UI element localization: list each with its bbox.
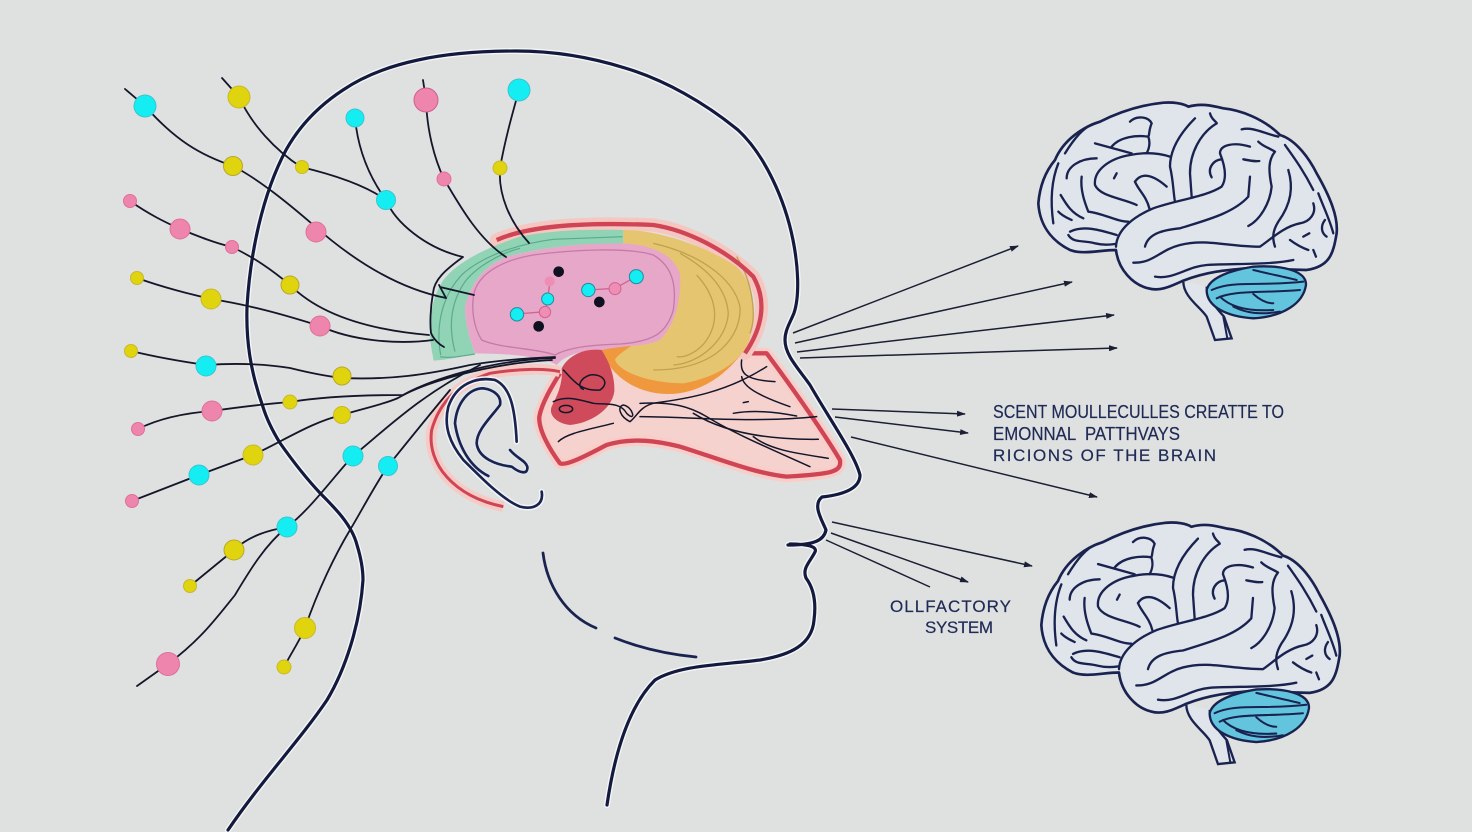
ear	[447, 379, 542, 508]
upper red outline	[497, 224, 761, 353]
label: olfactory system: OLLFACTORY	[890, 597, 1011, 616]
label: olfactory system: SYSTEM	[925, 618, 993, 637]
arrows from nose	[832, 409, 1097, 497]
molecules inside limbic region	[510, 266, 643, 332]
head profile outline	[228, 51, 860, 830]
orange band	[602, 337, 742, 394]
scent molecule nodes	[124, 79, 530, 676]
pink region	[465, 243, 680, 365]
caption: scent molecules: SCENT MOULLECULLES CREATTE TO	[993, 402, 1284, 422]
green band	[430, 230, 623, 361]
outer arc halo	[497, 224, 761, 353]
lower nasal cavity	[539, 353, 840, 477]
lower brain illustration	[1041, 523, 1340, 764]
jaw lines	[543, 553, 696, 657]
yellow region	[615, 230, 753, 383]
caption: scent molecules: RICIONS OF THE BRAIN	[993, 446, 1216, 465]
label: olfactory system	[890, 597, 1011, 637]
arrows to upper brain	[793, 246, 1117, 358]
limbic brain cross-section	[430, 224, 840, 507]
caption: scent molecules: EMONNAL PATTHVAYS	[993, 424, 1180, 444]
red amygdala blob	[551, 350, 614, 425]
arrows from mouth	[826, 522, 1032, 587]
olfactory nerve fibres	[553, 360, 828, 467]
upper brain illustration	[1038, 102, 1337, 340]
scent molecule pathways	[125, 78, 555, 686]
caption: scent molecules	[993, 402, 1284, 465]
